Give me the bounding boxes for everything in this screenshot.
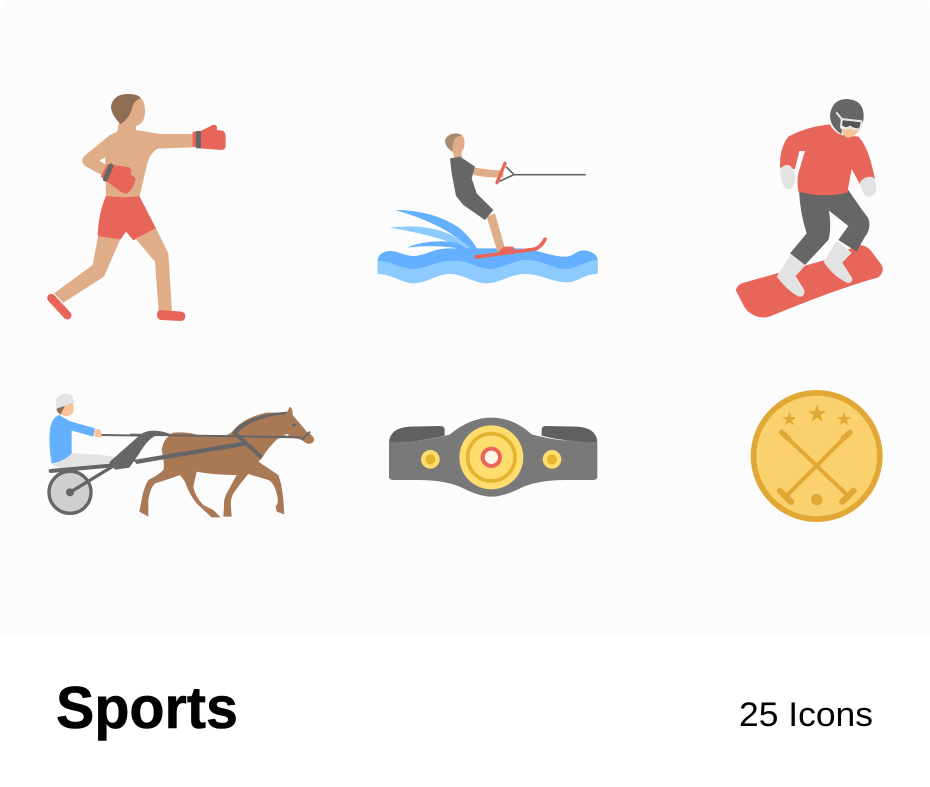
title: Sports bbox=[56, 675, 238, 741]
horse bbox=[130, 407, 314, 517]
icon: boxer bbox=[51, 94, 226, 321]
icon count: 25 Icons bbox=[739, 696, 873, 734]
icon: snowboarder bbox=[736, 99, 883, 317]
icon: harness racing horse and driver bbox=[49, 394, 314, 517]
icon: polo medal bbox=[751, 390, 883, 522]
upper body bbox=[780, 99, 876, 197]
boots bbox=[777, 241, 852, 297]
snowboard bbox=[736, 245, 883, 317]
icon: water skier bbox=[378, 133, 598, 283]
trousers bbox=[790, 190, 869, 265]
icon: championship belt bbox=[389, 418, 597, 497]
driver and sulky bbox=[49, 394, 172, 513]
